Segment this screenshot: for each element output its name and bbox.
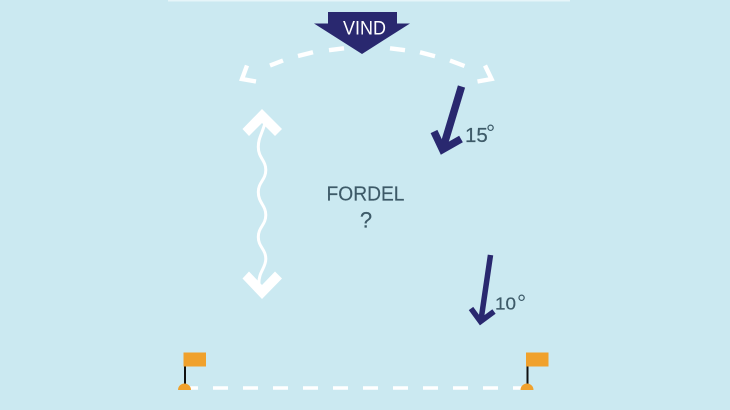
dashed arc with arrowheads (242, 48, 492, 82)
wavy double arrow (242, 109, 282, 299)
flag: left (178, 352, 206, 390)
question mark: ? (360, 208, 372, 232)
label: 15 degrees: ° (486, 120, 495, 146)
wind label: VIND (343, 18, 386, 40)
label: 15 degrees: 15 (465, 124, 488, 147)
label: 10 degrees: ° (517, 290, 526, 316)
flag: right (520, 352, 548, 390)
arrow: 10 degrees (471, 255, 494, 322)
label: 10 degrees: 10 (495, 294, 516, 314)
dashed start line (183, 386, 528, 390)
arrow: 15 degrees (434, 86, 462, 150)
wind arrow (314, 12, 410, 54)
heading: advantage: FORDEL (326, 182, 404, 206)
